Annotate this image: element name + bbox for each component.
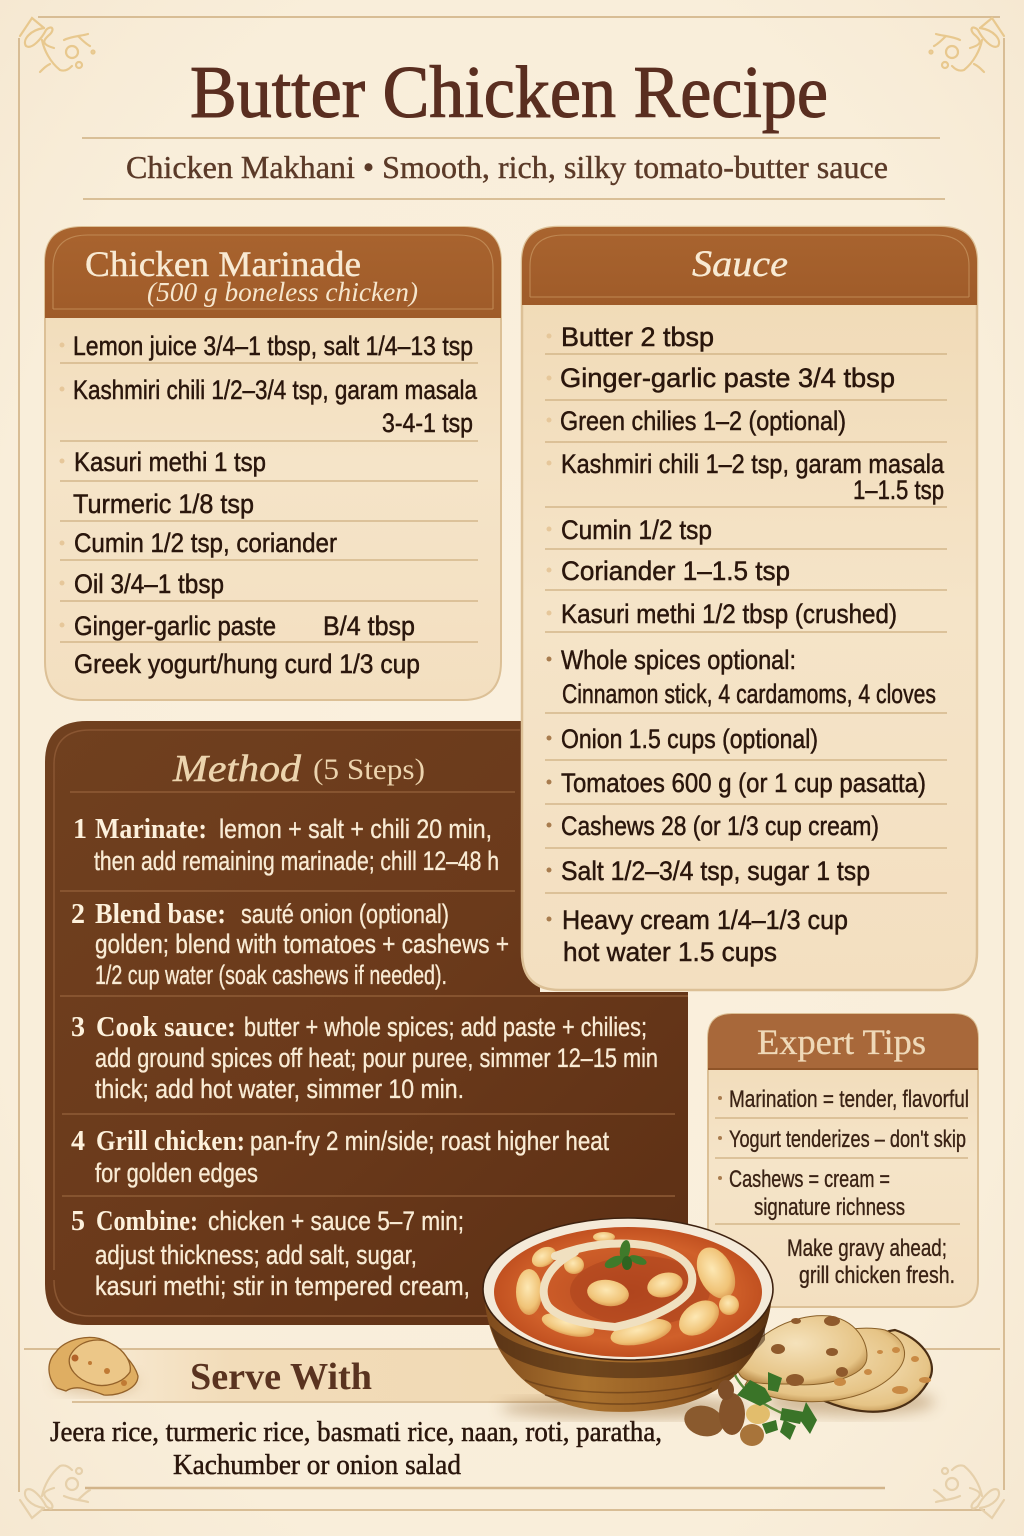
sauce ingredient list: Kashmiri chili 1–2 tsp, garam masala	[561, 449, 945, 479]
tips list: grill chicken fresh.	[799, 1262, 955, 1289]
illustration: butter chicken bowl	[483, 1218, 773, 1418]
sauce ingredient list: Coriander 1–1.5 tsp	[561, 556, 790, 586]
serve with text	[50, 1416, 662, 1481]
sauce ingredient list: Green chilies 1–2 (optional)	[560, 406, 846, 436]
title rule	[82, 137, 940, 139]
sauce ingredient list	[546, 322, 945, 967]
marinade ingredient list: Kashmiri chili 1/2–3/4 tsp, garam masala	[73, 375, 478, 405]
marinade ingredient list	[60, 331, 478, 679]
sauce ingredient list: Cumin 1/2 tsp	[561, 515, 712, 545]
step 5: adjust thickness; add salt, sugar,	[95, 1240, 417, 1270]
sauce header	[522, 227, 977, 305]
ornament: top right corner	[930, 18, 1004, 72]
step 5: 5	[71, 1206, 85, 1237]
step 2	[71, 899, 509, 990]
marinade ingredient list: Turmeric 1/8 tsp	[73, 489, 254, 519]
tips list: Marination = tender, flavorful	[729, 1086, 969, 1113]
step 1: lemon + salt + chili 20 min,	[219, 814, 492, 844]
serve with text: Jeera rice, turmeric rice, basmati rice, naan, roti, paratha,	[50, 1416, 662, 1448]
step 4: 4	[71, 1126, 85, 1157]
tips list: Make gravy ahead;	[787, 1235, 947, 1262]
step 2: Blend base:	[95, 899, 226, 930]
marinade title	[85, 244, 418, 307]
marinade title: Chicken Marinade	[85, 244, 361, 284]
marinade ingredient list: Kasuri methi 1 tsp	[74, 447, 266, 477]
sauce ingredient list: Tomatoes 600 g (or 1 cup pasatta)	[561, 768, 926, 798]
step 4: pan-fry 2 min/side; roast higher heat	[250, 1126, 609, 1156]
step 2: 1/2 cup water (soak cashews if needed).	[95, 960, 447, 990]
panel: expert tips	[708, 1014, 978, 1307]
marinade header	[45, 227, 501, 318]
sauce ingredient list: Whole spices optional:	[561, 645, 796, 675]
marinade ingredient list: 3-4-1 tsp	[382, 408, 473, 438]
marinade body	[45, 227, 501, 700]
sauce ingredient list: Heavy cream 1/4–1/3 cup	[562, 905, 848, 935]
panel: chicken marinade	[45, 227, 501, 700]
tips list: Cashews = cream =	[729, 1166, 890, 1193]
step 2: 2	[71, 899, 85, 930]
step 3	[71, 1012, 658, 1104]
bowl rim	[483, 1218, 773, 1360]
panel: sauce	[522, 227, 977, 990]
marinade ingredient list: Lemon juice 3/4–1 tbsp, salt 1/4–13 tsp	[73, 331, 473, 361]
method heading	[172, 748, 425, 790]
panel: method	[45, 721, 688, 1325]
step 1	[73, 814, 499, 876]
sauce ingredient list: Salt 1/2–3/4 tsp, sugar 1 tsp	[561, 856, 870, 886]
method heading: (5 Steps)	[313, 753, 425, 786]
sauce ingredient list: Butter 2 tbsp	[561, 322, 714, 352]
herb garnish	[603, 1239, 648, 1271]
step 3: 3	[71, 1012, 85, 1043]
serve with heading: Serve With	[190, 1356, 372, 1398]
tips header	[708, 1014, 978, 1068]
icon: small flatbreads	[49, 1337, 138, 1395]
serve with band	[24, 1349, 1000, 1402]
chicken pieces	[516, 1232, 743, 1350]
title: Butter Chicken Recipe	[190, 52, 828, 134]
step 4	[71, 1126, 609, 1188]
marinade ingredient list: B/4 tbsp	[323, 611, 415, 641]
step 2: sauté onion (optional)	[241, 899, 449, 929]
sauce ingredient list: Onion 1.5 cups (optional)	[561, 724, 818, 754]
illustration: naan stack	[738, 1316, 935, 1416]
tips title: Expert Tips	[757, 1022, 926, 1062]
tips body	[708, 1014, 978, 1307]
sauce	[494, 1227, 762, 1357]
step 5	[71, 1206, 470, 1301]
subtitle rule	[83, 198, 945, 200]
step 3: thick; add hot water, simmer 10 min.	[95, 1074, 464, 1104]
sauce ingredient list: 1–1.5 tsp	[853, 475, 944, 505]
sauce ingredient list: Ginger-garlic paste 3/4 tbsp	[560, 363, 895, 393]
bowl body	[484, 1295, 772, 1412]
step 4: for golden edges	[95, 1158, 258, 1188]
serve with text: Kachumber or onion salad	[173, 1449, 461, 1481]
sauce ingredient list: Cashews 28 (or 1/3 cup cream)	[561, 811, 879, 841]
sauce body	[522, 227, 977, 990]
sauce title: Sauce	[692, 244, 788, 285]
step 3: Cook sauce:	[96, 1012, 236, 1043]
marinade ingredient list: Ginger-garlic paste	[74, 611, 276, 641]
step 2: golden; blend with tomatoes + cashews +	[95, 929, 509, 959]
step 1: 1	[73, 814, 87, 845]
step 5: chicken + sauce 5–7 min;	[208, 1206, 464, 1236]
step 5: Combine:	[96, 1206, 198, 1237]
method background	[45, 721, 688, 1325]
step 1: Marinate:	[95, 814, 207, 845]
illustration: herbs and spices	[681, 1372, 817, 1446]
marinade ingredient list: Oil 3/4–1 tbsp	[74, 569, 224, 599]
cream swirl	[544, 1243, 692, 1327]
marinade ingredient list: Cumin 1/2 tsp, coriander	[74, 528, 337, 558]
step 3: butter + whole spices; add paste + chilies;	[244, 1012, 647, 1042]
sauce ingredient list: hot water 1.5 cups	[563, 937, 777, 967]
ornament: bottom right corner	[934, 1465, 1004, 1518]
marinade title: (500 g boneless chicken)	[147, 277, 418, 307]
step 5: kasuri methi; stir in tempered cream,	[95, 1271, 470, 1301]
ornament: top left corner	[20, 18, 94, 72]
step 3: add ground spices off heat; pour puree, simmer 12–15 min	[95, 1043, 658, 1073]
method heading: Method	[172, 748, 302, 790]
ornament: bottom left corner	[20, 1465, 90, 1518]
sauce ingredient list: Kasuri methi 1/2 tbsp (crushed)	[561, 599, 897, 629]
method inner outline	[54, 730, 520, 1316]
marinade ingredient list: Greek yogurt/hung curd 1/3 cup	[74, 649, 420, 679]
tips list	[718, 1086, 969, 1289]
step 1: then add remaining marinade; chill 12–48 h	[94, 846, 499, 876]
step 4: Grill chicken:	[96, 1126, 245, 1157]
tips list: signature richness	[754, 1194, 905, 1221]
subtitle: Chicken Makhani • Smooth, rich, silky tomato-butter sauce	[126, 149, 888, 185]
